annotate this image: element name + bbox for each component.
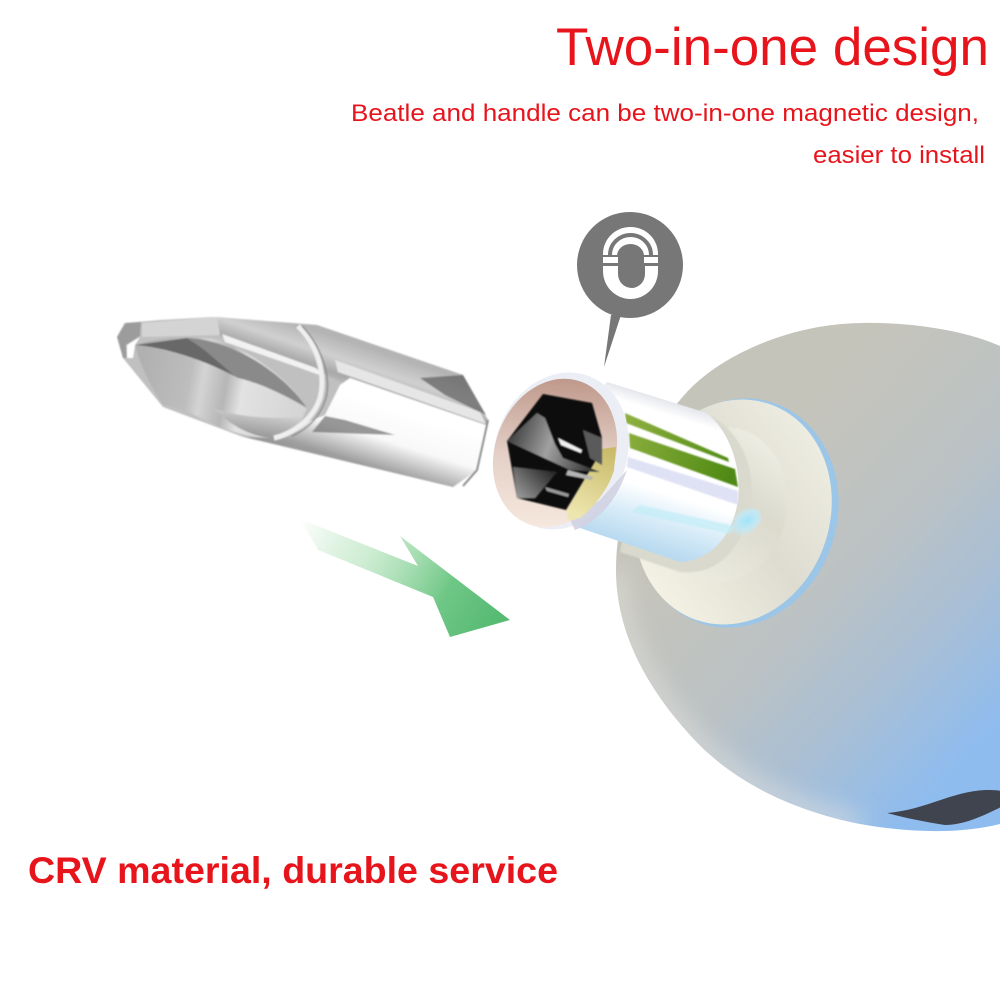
handle dark slot xyxy=(887,790,1000,825)
bottom caption: CRV material, durable service xyxy=(28,850,558,891)
bit upper body bands xyxy=(217,317,488,430)
socket front face xyxy=(473,361,637,545)
socket green reflections xyxy=(625,413,738,534)
socket hexagon opening xyxy=(507,394,602,510)
bit shank highlight xyxy=(245,378,486,487)
icon: magnet callout xyxy=(577,212,683,367)
socket front rim xyxy=(472,353,650,549)
title: Two-in-one design xyxy=(556,18,989,77)
description text: easier to install xyxy=(813,142,985,169)
socket yellow facet xyxy=(566,447,616,521)
socket barrel xyxy=(555,382,739,562)
bit flute xyxy=(135,337,307,438)
socket base rim xyxy=(620,411,752,572)
icon: screwdriver bit xyxy=(117,317,488,487)
socket xyxy=(472,353,768,572)
handle collar xyxy=(606,374,860,650)
arrow xyxy=(300,519,510,637)
description text xyxy=(351,100,985,169)
bit tip strip xyxy=(142,317,220,337)
socket blue glow xyxy=(720,501,768,545)
handle xyxy=(606,323,1000,831)
handle recess xyxy=(644,417,800,593)
description text: Beatle and handle can be two-in-one magnetic design, xyxy=(351,100,979,127)
handle blue rim xyxy=(606,372,868,654)
bit collar ring xyxy=(274,326,322,438)
